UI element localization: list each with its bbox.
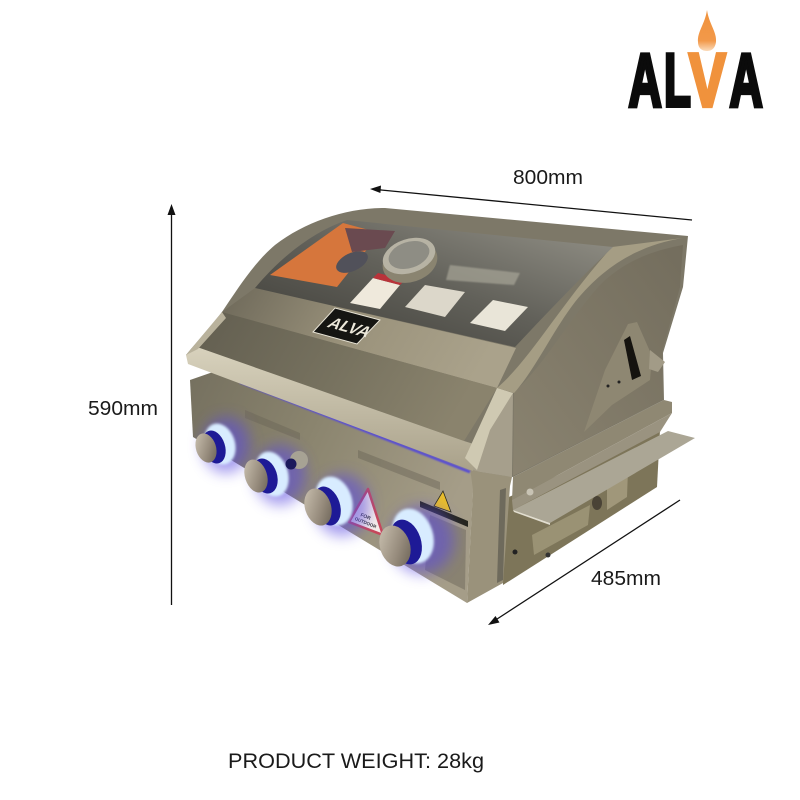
warning triangle: outdoor use: OUTDOOR (354, 516, 378, 530)
white label 2 (405, 285, 465, 317)
igniter button (286, 451, 308, 470)
hood shell (186, 208, 688, 477)
label: 800mm: 800mm (513, 166, 583, 189)
ALVA badge: ALVA (323, 315, 376, 341)
warning labels (349, 489, 468, 535)
label: 590mm: 590mm (88, 397, 158, 420)
fold-out side shelf (513, 431, 695, 523)
upper front band (222, 288, 516, 388)
left handle end (186, 312, 226, 355)
side of base (467, 468, 512, 603)
warning triangle: outdoor use (349, 489, 383, 535)
logo wordmark: V (689, 38, 726, 122)
red label header (373, 273, 405, 285)
dark window (255, 220, 613, 347)
front handle (186, 347, 480, 471)
logo wordmark: L (664, 39, 691, 123)
dimension: height 590mm (88, 204, 176, 605)
knob 3 (300, 472, 370, 536)
caution triangle (434, 491, 451, 512)
shelf bolt (526, 488, 534, 496)
product weight: PRODUCT WEIGHT: 28kg (228, 748, 484, 773)
dimension: width 800mm (370, 166, 692, 220)
lower front panel (197, 312, 497, 441)
hood (186, 208, 688, 477)
warning triangle: outdoor use: FOR (359, 512, 372, 522)
white label 1 (350, 278, 400, 309)
hood side panel (513, 245, 683, 476)
dimension: depth 485mm (488, 500, 680, 625)
right handle end cap (465, 388, 513, 477)
orange sticker (270, 223, 395, 287)
logo wordmark (628, 38, 763, 123)
caution strip (420, 501, 468, 527)
panel fine print (245, 410, 466, 590)
ALVA badge (313, 308, 380, 344)
arrow: height (168, 204, 176, 605)
temperature gauge (377, 231, 443, 290)
arrow: width (370, 186, 692, 220)
grill illustration (186, 208, 695, 603)
white label 3 (470, 300, 528, 331)
knob 2 (240, 445, 306, 505)
arrow: depth (488, 500, 680, 625)
logo wordmark: A (730, 40, 763, 123)
hood side bracket (584, 322, 665, 432)
base front panel (190, 372, 512, 603)
logo: ALVA (628, 10, 763, 123)
side rail (512, 400, 672, 500)
knob 4 (374, 503, 454, 574)
lid curved trim (497, 238, 683, 393)
knob 1 (192, 417, 250, 473)
window reflection (446, 265, 520, 285)
logo flame (698, 10, 716, 51)
label: 485mm: 485mm (591, 567, 661, 590)
logo wordmark: A (628, 40, 662, 123)
side rail and shelf (512, 400, 695, 525)
control knobs with blue glow (192, 417, 454, 574)
blue light strip (240, 382, 470, 472)
rear lower housing (502, 430, 660, 585)
